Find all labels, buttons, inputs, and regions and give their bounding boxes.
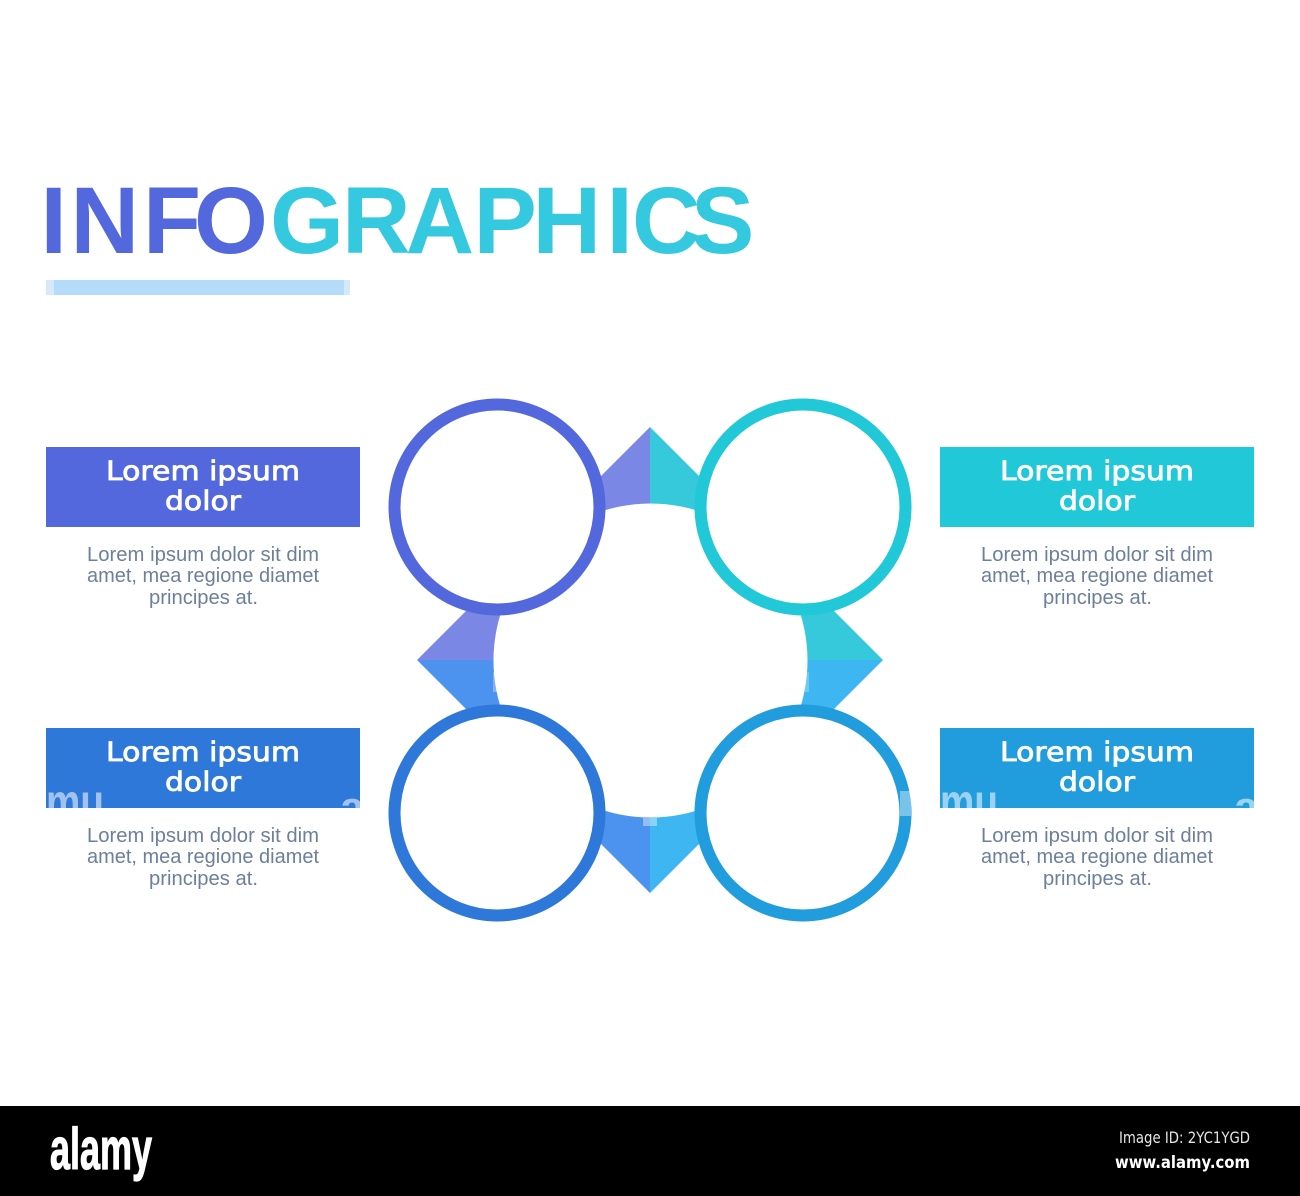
heading: top right: dolor: [1059, 486, 1136, 517]
heading: top left: Lorem ipsum: [106, 456, 300, 487]
title underline: [46, 280, 350, 295]
text: top left: amet, mea regione diamet: [87, 565, 319, 587]
text: top right: principes at.: [1043, 587, 1152, 609]
watermark fragments: bottom right: a: [1234, 783, 1259, 832]
banner: top left: [46, 447, 360, 527]
text: bottom right: amet, mea regione diamet: [981, 846, 1213, 868]
circle: top left: [394, 404, 600, 610]
text: bottom left: principes at.: [149, 868, 258, 890]
circle: bottom left: [394, 710, 600, 916]
text: top left: Lorem ipsum dolor sit dim: [87, 544, 319, 566]
text: bottom left: amet, mea regione diamet: [87, 846, 319, 868]
url: www.alamy.com: [1115, 1153, 1250, 1173]
title: INFO: [40, 168, 268, 274]
heading: bottom left: [106, 737, 300, 798]
heading: bottom right: Lorem ipsum: [1000, 737, 1194, 768]
title: [40, 168, 754, 274]
text: bottom right: principes at.: [1043, 868, 1152, 890]
heading: top right: Lorem ipsum: [1000, 456, 1194, 487]
title: GRAPHICS: [270, 168, 754, 274]
text: bottom left: Lorem ipsum dolor sit dim: [87, 825, 319, 847]
text: top left: principes at.: [149, 587, 258, 609]
text: top right: Lorem ipsum dolor sit dim: [981, 544, 1213, 566]
text: bottom right: [981, 825, 1213, 890]
heading: bottom left: dolor: [165, 767, 242, 798]
watermark fragments: bottom left: [48, 792, 360, 808]
panel: top left: [46, 447, 360, 609]
heading: bottom right: [1000, 737, 1194, 798]
watermark fragments: bottom left: mu: [46, 774, 104, 830]
text: top right: amet, mea regione diamet: [981, 565, 1213, 587]
watermark fragments: bottom right: mu: [940, 774, 998, 830]
panel: top right: [940, 447, 1254, 609]
panel: bottom left: [46, 728, 365, 890]
panel: bottom right: [940, 728, 1259, 890]
circle: top right: [700, 404, 906, 610]
text: bottom right: Lorem ipsum dolor sit dim: [981, 825, 1213, 847]
arrows: diamond quadrants: [417, 427, 883, 893]
text: top right: [981, 544, 1213, 609]
heading: bottom left: Lorem ipsum: [106, 737, 300, 768]
logo: alamy: alamy: [50, 1117, 152, 1182]
heading: top right: [1000, 456, 1194, 517]
image id: Image ID: 2YC1YGD: [1119, 1128, 1250, 1147]
banner: bottom right: [940, 728, 1254, 808]
cycle diagram: [394, 404, 911, 916]
banner: top right: [940, 447, 1254, 527]
heading: top left: [106, 456, 300, 517]
watermark fragments: bottom left: a: [340, 783, 365, 832]
circle: bottom right: [700, 710, 906, 916]
text: top left: [87, 544, 319, 609]
watermark fragments: bottom right: [942, 792, 1254, 808]
banner: bottom left: [46, 728, 360, 808]
text: bottom left: [87, 825, 319, 890]
heading: bottom right: dolor: [1059, 767, 1136, 798]
heading: top left: dolor: [165, 486, 242, 517]
footer bar: [0, 1106, 1300, 1196]
